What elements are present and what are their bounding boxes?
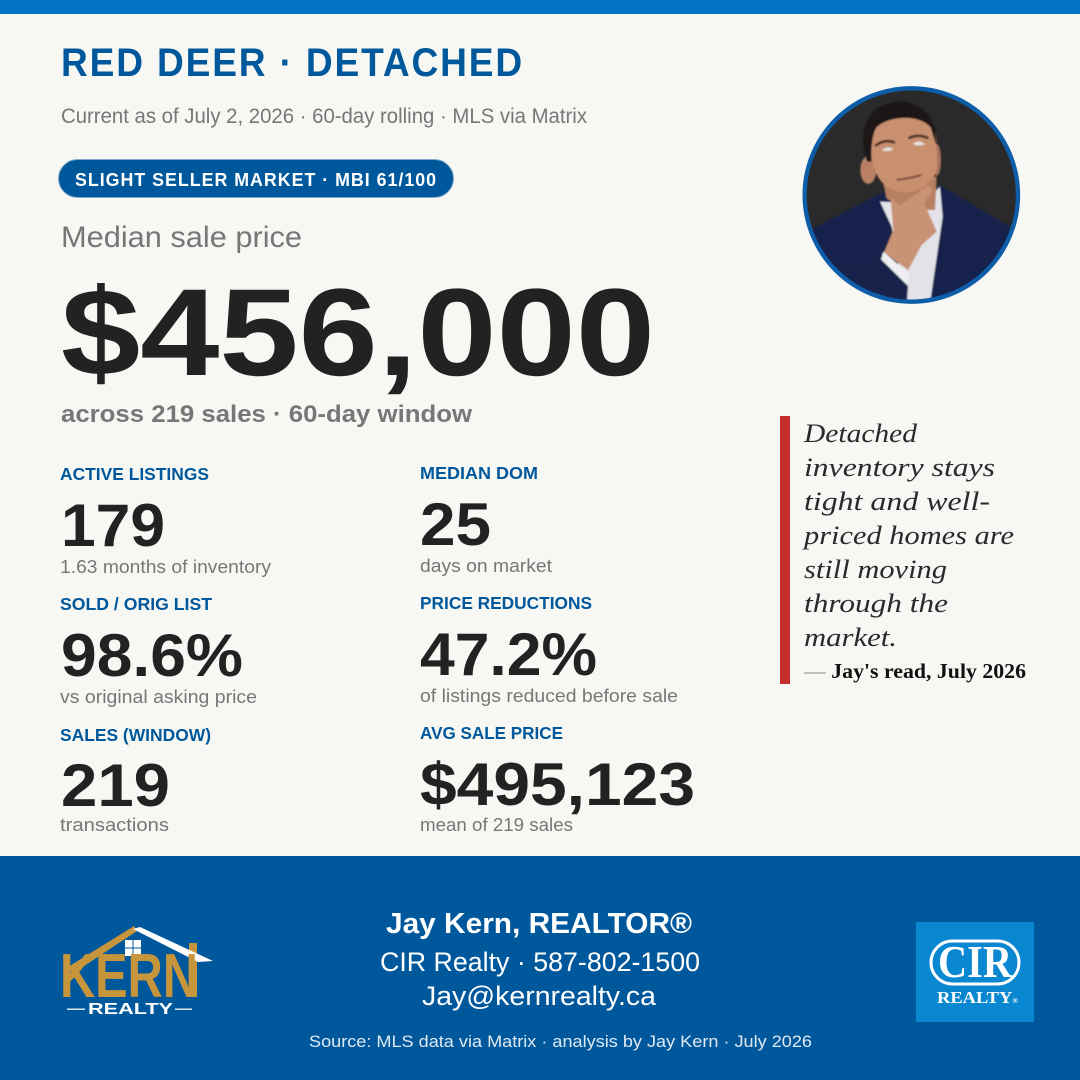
subtitle: Current as of July 2, 2026 · 60-day rolling · MLS via Matrix xyxy=(61,105,587,128)
stat: average sale price: AVG SALE PRICE xyxy=(420,723,563,743)
eyes xyxy=(882,142,925,151)
stat: sales window: 219 xyxy=(61,752,170,819)
top bar xyxy=(0,0,1080,14)
quote panel: inventory stays xyxy=(804,452,995,482)
stat: price reductions: of listings reduced before sale xyxy=(420,685,678,706)
stat: sold over original list: SOLD / ORIG LIST xyxy=(60,594,212,614)
stat: price reductions xyxy=(420,593,678,706)
neck xyxy=(882,177,937,210)
logo: Kern Realty: KERN xyxy=(60,942,198,1011)
stat: median DOM xyxy=(420,463,552,576)
stat: sold over original list xyxy=(60,594,257,707)
stat: sold over original list: vs original asking price xyxy=(60,686,257,707)
mouth xyxy=(897,175,922,180)
sleeve xyxy=(880,258,909,300)
quote panel: still moving xyxy=(804,554,947,584)
quote panel: tight and well- xyxy=(804,486,990,516)
quote panel xyxy=(780,416,1026,684)
stat: active listings xyxy=(60,464,272,577)
logo: CIR Realty: CIR xyxy=(938,936,1013,987)
logo: Kern Realty xyxy=(60,926,213,1018)
logo: CIR Realty: REALTY ® xyxy=(937,988,1019,1007)
stat: sales window xyxy=(60,725,211,835)
median label: Median sale price xyxy=(61,221,302,254)
ear left xyxy=(860,156,876,184)
stat: average sale price: $495,123 xyxy=(420,751,695,818)
stat: active listings: ACTIVE LISTINGS xyxy=(60,464,209,484)
market status pill xyxy=(58,160,454,198)
median caption: across 219 sales · 60-day window xyxy=(61,401,472,428)
stat: sales window: SALES (WINDOW) xyxy=(60,725,211,745)
shirt xyxy=(880,187,943,303)
logo: Kern Realty: REALTY xyxy=(88,1001,173,1018)
footer company and phone: CIR Realty · 587-802-1500 xyxy=(380,947,700,977)
face xyxy=(870,117,937,192)
quote panel: — Jay's read, July 2026 xyxy=(803,659,1026,683)
stat: sold over original list: 98.6% xyxy=(61,622,243,689)
suit xyxy=(813,184,1010,298)
quote panel: through the xyxy=(804,588,948,618)
quote panel: priced homes are xyxy=(802,520,1014,550)
stat: active listings: 179 xyxy=(61,492,165,559)
quote panel: Detached xyxy=(803,418,918,448)
footer email: Jay@kernrealty.ca xyxy=(422,981,657,1011)
portrait xyxy=(803,88,1020,310)
market status pill: SLIGHT SELLER MARKET · MBI 61/100 xyxy=(75,170,437,190)
hair xyxy=(863,101,936,162)
stat: average sale price xyxy=(420,723,695,835)
stat: median DOM: MEDIAN DOM xyxy=(420,463,538,483)
median price: $456,000 xyxy=(61,264,655,402)
quote panel: market. xyxy=(804,622,897,652)
stat: active listings: 1.63 months of inventory xyxy=(60,556,272,577)
stat: median DOM: days on market xyxy=(420,555,552,576)
footer name: Jay Kern, REALTOR® xyxy=(386,908,692,940)
cuff xyxy=(881,252,909,285)
stat: sales window: transactions xyxy=(60,814,169,835)
source line: Source: MLS data via Matrix · analysis by Jay Kern · July 2026 xyxy=(309,1032,812,1051)
stat: price reductions: PRICE REDUCTIONS xyxy=(420,593,592,613)
stat: average sale price: mean of 219 sales xyxy=(420,814,573,835)
ear right xyxy=(932,144,941,176)
stat: median DOM: 25 xyxy=(420,491,491,558)
logo: CIR Realty xyxy=(916,922,1034,1022)
hand xyxy=(884,185,937,270)
stat: price reductions: 47.2% xyxy=(420,621,597,688)
title: RED DEER · DETACHED xyxy=(61,41,524,85)
footer panel xyxy=(0,856,1080,1080)
